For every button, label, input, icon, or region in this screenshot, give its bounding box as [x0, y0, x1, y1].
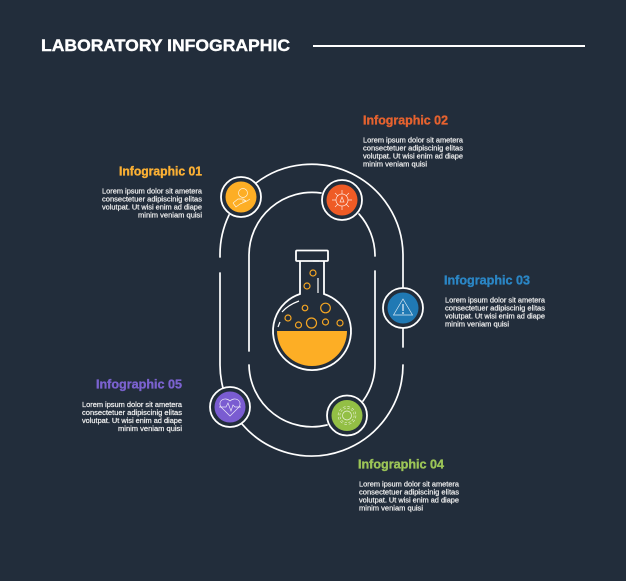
- panel: infographic 03: [444, 274, 545, 328]
- flask outline: [273, 261, 351, 370]
- heading 04: Infographic 04: [358, 458, 444, 472]
- heading 05: Infographic 05: [96, 378, 182, 392]
- icon: hand holding coin: [221, 177, 261, 217]
- body 04: [359, 480, 459, 512]
- body 05: [82, 400, 182, 433]
- body 03: [445, 296, 545, 328]
- body 03: volutpat. Ut wisi enim ad diape: [445, 312, 545, 320]
- body 05: Lorem ipsum dolor sit ametera: [82, 400, 182, 409]
- title rule: [313, 45, 585, 47]
- icon: warning triangle: [383, 288, 423, 328]
- inner track: [249, 192, 375, 427]
- body 02: minim veniam quisi: [363, 160, 427, 168]
- body 05: consectetuer adipiscinig elitas: [82, 408, 182, 417]
- bubbles: [285, 270, 343, 328]
- icon: flask: [273, 250, 351, 370]
- body 04: minim veniam quisi: [359, 504, 423, 512]
- panel: infographic 04: [358, 458, 459, 512]
- heading 01: Infographic 01: [119, 164, 202, 178]
- body 04: Lorem ipsum dolor sit ametera: [359, 480, 459, 488]
- panel: infographic 01: [102, 164, 202, 220]
- body 03: Lorem ipsum dolor sit ametera: [445, 296, 545, 304]
- icon: heart pulse: [210, 387, 250, 427]
- body 04: volutpat. Ut wisi enim ad diape: [359, 496, 459, 504]
- body 01: minim veniam quisi: [138, 210, 202, 220]
- body 02: volutpat. Ut wisi enim ad diape: [363, 152, 463, 160]
- panel: infographic 05: [82, 378, 182, 433]
- body 01: volutpat. Ut wisi enim ad diape: [102, 202, 202, 212]
- icon: gear: [327, 396, 367, 436]
- body 05: volutpat. Ut wisi enim ad diape: [82, 416, 182, 425]
- body 03: minim veniam quisi: [445, 320, 509, 328]
- heading 03: Infographic 03: [444, 274, 530, 288]
- body 01: Lorem ipsum dolor sit ametera: [102, 186, 202, 196]
- body 04: consectetuer adipiscinig elitas: [359, 488, 459, 496]
- panel: infographic 02: [363, 114, 463, 168]
- body 02: [363, 136, 463, 168]
- heading 02: Infographic 02: [363, 114, 448, 128]
- flask highlights: [278, 261, 319, 327]
- body 03: consectetuer adipiscinig elitas: [445, 304, 545, 312]
- icon: virus: [322, 180, 362, 220]
- flask cap: [296, 250, 328, 261]
- title: LABORATORY INFOGRAPHIC: [41, 36, 290, 55]
- body 01: [102, 186, 202, 220]
- outer track: [220, 164, 403, 456]
- body 02: Lorem ipsum dolor sit ametera: [363, 136, 463, 144]
- body 01: consectetuer adipiscinig elitas: [102, 194, 202, 204]
- body 02: consectetuer adipiscinig elitas: [363, 144, 463, 152]
- flask liquid: [277, 331, 347, 366]
- body 05: minim veniam quisi: [118, 424, 182, 433]
